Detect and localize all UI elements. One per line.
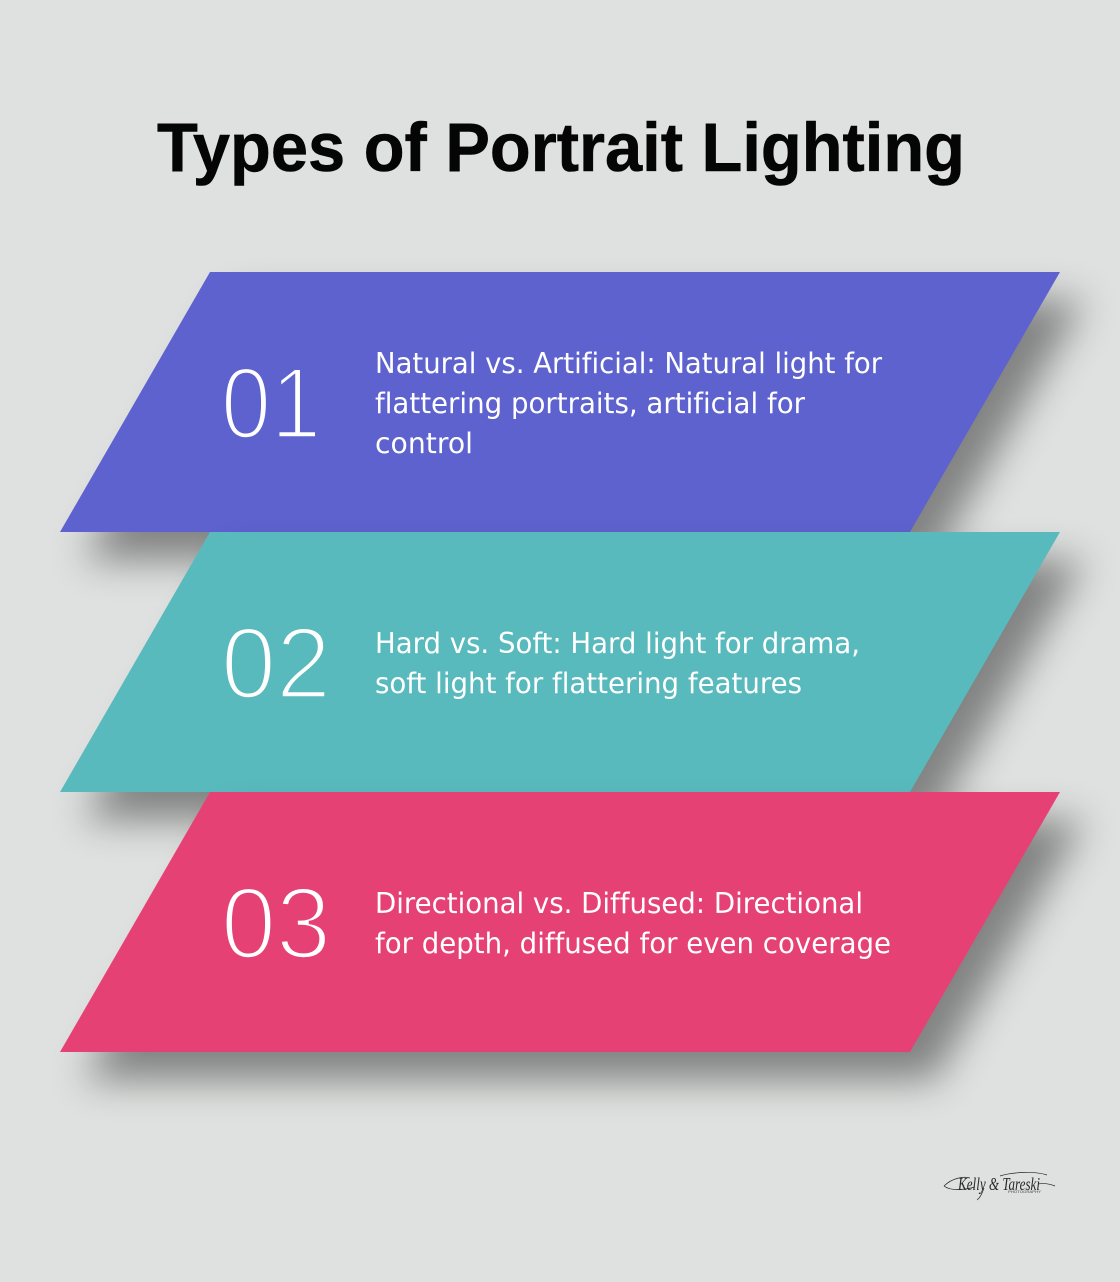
title: Types of Portrait Lighting <box>157 109 965 186</box>
number 01: 01 <box>221 348 321 460</box>
text block 01: flattering portraits, artificial for <box>375 387 805 420</box>
panel: band 03 directional vs diffused <box>60 792 1060 1052</box>
text block 01: control <box>375 427 473 460</box>
number 02: 02 <box>221 608 331 720</box>
number 03: 03 <box>221 868 331 980</box>
panel: band 02 hard vs soft <box>60 532 1060 792</box>
logo: signature <box>944 1172 1055 1200</box>
text block 02: soft light for flattering features <box>375 667 802 700</box>
text block 03: Directional vs. Diffused: Directional <box>375 887 863 920</box>
logo: signature: PHOTOGRAPHY <box>1008 1190 1042 1194</box>
logo: signature: Kelly & Tareski <box>957 1174 1040 1194</box>
text block 02: Hard vs. Soft: Hard light for drama, <box>375 627 860 660</box>
text block 01: Natural vs. Artificial: Natural light for <box>375 347 882 380</box>
text block 03: for depth, diffused for even coverage <box>375 927 891 960</box>
panel: band 01 natural vs artificial <box>60 272 1060 532</box>
